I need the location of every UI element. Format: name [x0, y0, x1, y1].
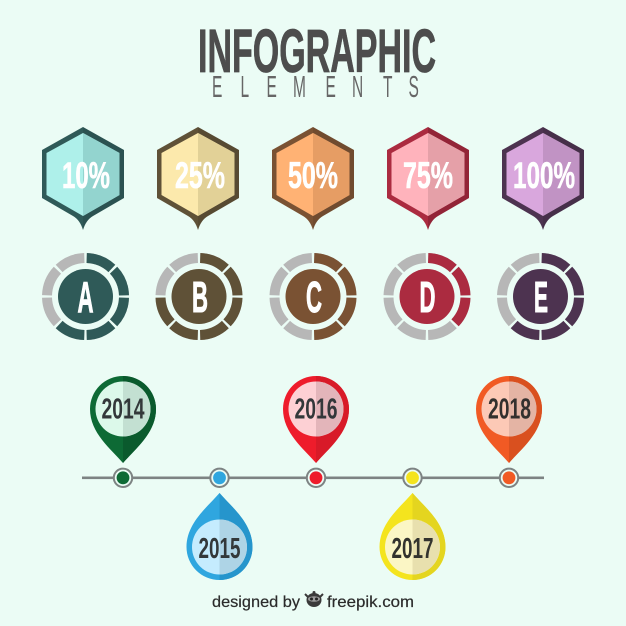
node: 2016: [307, 469, 325, 487]
drop: 2015: [186, 493, 252, 580]
drop: 2017: [380, 493, 446, 580]
drop: 2015: 2015: [198, 533, 240, 565]
hexagon: 75%: 75%: [403, 155, 453, 196]
node: 2018: [500, 469, 518, 487]
hexagon: 25%: [157, 127, 239, 230]
pin: 2018: [476, 376, 542, 463]
subtitle: ELEMENTS: [212, 70, 419, 105]
node: 2017: [403, 469, 422, 487]
pin: 2014: [90, 376, 156, 463]
hexagon: 100%: 100%: [513, 155, 575, 196]
ring: A: [46, 257, 125, 336]
ring badges row: [46, 257, 580, 336]
ring: D: [387, 257, 467, 336]
pin: 2016: [283, 376, 349, 463]
ring: D: D: [420, 273, 436, 322]
node: 2014: [114, 469, 132, 487]
hexagon: 50%: [272, 127, 354, 230]
hexagon: 10%: [42, 127, 124, 230]
footer credit: designed by: [212, 594, 300, 611]
pin: 2014: 2014: [102, 394, 144, 426]
ring: E: E: [534, 273, 548, 322]
title: INFOGRAPHIC: [198, 17, 436, 85]
hexagon: 50%: 50%: [288, 155, 338, 196]
ring: B: B: [192, 273, 208, 322]
pin: 2018: 2018: [488, 394, 531, 426]
hexagon: 10%: 10%: [62, 155, 110, 196]
ring: A: A: [78, 273, 94, 322]
node: 2015: [210, 469, 229, 487]
hexagon: 100%: [502, 127, 584, 230]
footer credit: freepik.com: [327, 594, 414, 611]
icon: freepik mascot: [305, 591, 323, 607]
drop: 2017: 2017: [392, 533, 434, 565]
ring: B: [159, 257, 239, 336]
footer credit: [212, 591, 414, 611]
ring: C: C: [306, 273, 322, 322]
hexagon: 25%: 25%: [175, 155, 225, 196]
ring: E: [501, 257, 580, 336]
timeline axis: [82, 469, 544, 487]
hexagon badges row: [42, 127, 584, 230]
pin: 2016: 2016: [294, 394, 338, 426]
hexagon: 75%: [387, 127, 469, 230]
ring: C: [273, 257, 353, 336]
